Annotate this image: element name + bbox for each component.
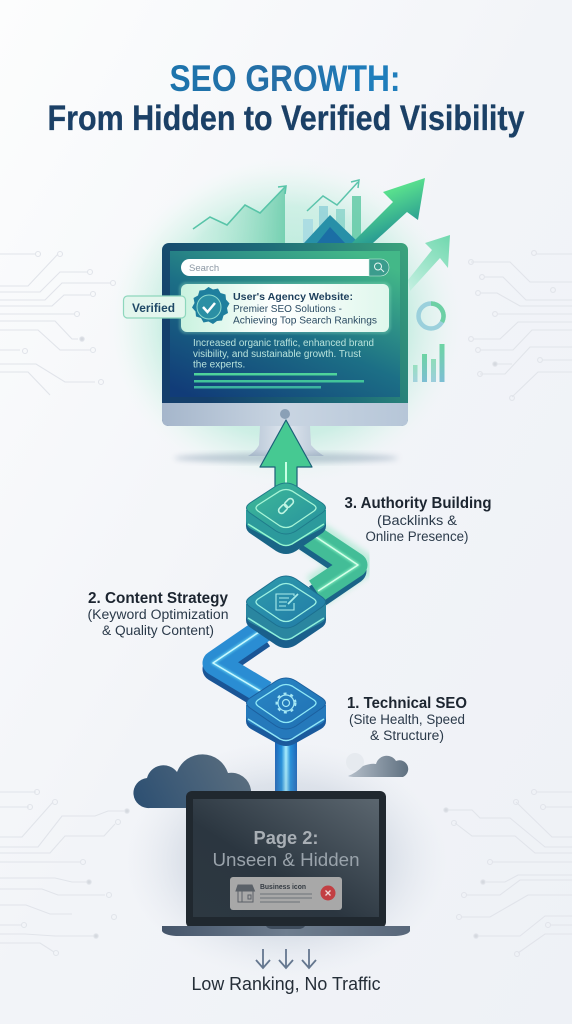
circuit pattern: upper left (0, 252, 116, 395)
screen (170, 251, 400, 397)
label: technical seo (347, 695, 467, 743)
shadow around laptop (126, 742, 446, 978)
label: authority building: (Backlinks & (377, 513, 457, 528)
label: authority building: Online Presence) (366, 529, 468, 544)
monitor stand (248, 426, 324, 456)
description text (193, 338, 374, 370)
title (48, 58, 525, 138)
screen text: Page 2: (254, 828, 318, 848)
screen text (212, 828, 360, 870)
label: content strategy: (Keyword Optimization (88, 607, 228, 622)
chart: small bars right (413, 344, 444, 382)
search bar: Search (189, 263, 219, 274)
laptop screen (193, 799, 379, 917)
laptop base (162, 926, 410, 936)
label: content strategy: 2. Content Strategy (88, 590, 228, 607)
chart: bars and trend line (303, 180, 361, 243)
circuit pattern: upper right (469, 251, 572, 400)
icon: donut chart (418, 303, 444, 328)
monitor chin (162, 403, 408, 426)
search bar (181, 259, 389, 276)
icon: red x (320, 886, 336, 900)
icon: chevrons behind monitor (304, 215, 359, 243)
cloud: large (133, 754, 251, 808)
result card: Achieving Top Search Rankings (233, 316, 377, 326)
label: technical seo: & Structure) (370, 728, 444, 743)
description text: visibility, and sustainable growth. Trust (193, 349, 361, 360)
circuit pattern: lower right (444, 790, 572, 956)
path stem to laptop (275, 735, 297, 795)
result card (124, 282, 391, 334)
icon: large growth arrow (352, 178, 425, 243)
verified pill: Verified (132, 301, 175, 315)
business card (230, 877, 342, 910)
icon: gear (276, 694, 296, 712)
label: authority building: 3. Authority Building (344, 495, 492, 512)
icon: secondary growth arrow (408, 235, 450, 291)
laptop lid (186, 791, 386, 928)
label: content strategy (88, 590, 228, 638)
monitor (124, 243, 408, 463)
glow under green path (308, 533, 355, 591)
path segment green (306, 533, 358, 597)
label: technical seo: (Site Health, Speed (349, 712, 465, 727)
cloud: small (346, 753, 408, 777)
arrows: down (256, 949, 316, 968)
icon: link (277, 497, 295, 515)
green arrow into monitor (260, 420, 312, 495)
circuit pattern: lower left (0, 790, 129, 956)
label: technical seo: 1. Technical SEO (347, 695, 467, 712)
node 3: authority building (246, 483, 326, 554)
icon: verified badge (192, 287, 230, 324)
result card: User's Agency Website: (233, 291, 353, 303)
path segment blue (213, 630, 265, 699)
chart: line chart with area (193, 186, 286, 243)
icon: storefront (236, 885, 254, 902)
screen text: Unseen & Hidden (212, 849, 360, 870)
business card: Business icon (260, 884, 306, 891)
green glow halo around monitor (107, 157, 463, 487)
title: SEO GROWTH: (170, 58, 400, 99)
placeholder lines (194, 373, 364, 388)
result card: Premier SEO Solutions - (233, 304, 342, 315)
laptop (162, 791, 410, 936)
label: low ranking: Low Ranking, No Traffic (192, 973, 380, 994)
verified pill (124, 296, 186, 318)
node 2: content strategy (246, 576, 326, 648)
icon: document with pencil (276, 594, 298, 610)
description text: Increased organic traffic, enhanced brand (193, 338, 374, 349)
description text: the experts. (193, 360, 245, 370)
monitor bezel (162, 243, 408, 426)
label: authority building (344, 495, 492, 544)
node 1: technical seo (246, 678, 326, 746)
label: content strategy: & Quality Content) (102, 623, 214, 638)
